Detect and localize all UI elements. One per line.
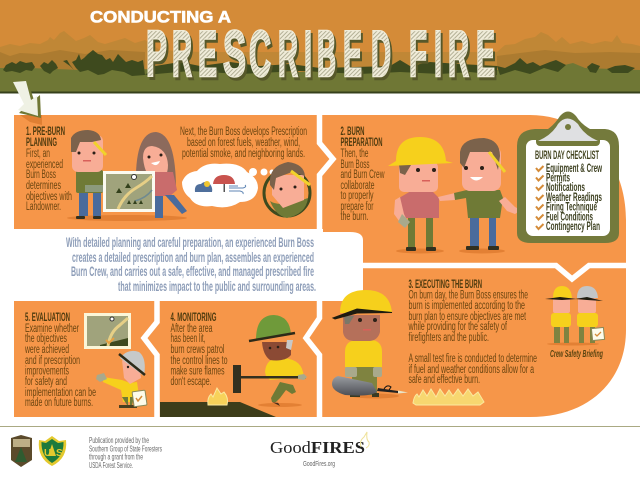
start arrow: [13, 81, 42, 125]
heading: 5. EVALUATION: [25, 312, 70, 324]
publication credit: Southern Group of State Foresters: [89, 444, 162, 454]
title: Prescribed Fire: R: [278, 17, 298, 90]
panel 2 text: prepare for: [340, 201, 374, 213]
checklist items: Notifications: [546, 182, 585, 194]
text: E: [476, 17, 495, 90]
body text: Burn Boss: [26, 169, 56, 181]
mid tree line: [0, 50, 640, 72]
body text: make sure flames: [170, 366, 225, 378]
body text: determines: [26, 180, 61, 192]
body text: implementation can be: [25, 387, 96, 399]
body text: burn crews patrol: [170, 344, 224, 356]
summary statement: that minimizes impact to the public and surrounding areas.: [118, 279, 316, 294]
title: Prescribed Fire: E: [343, 17, 362, 90]
burned ground: [160, 402, 276, 417]
panel 2 heading: [340, 126, 382, 149]
title: Prescribed Fire: R: [172, 17, 192, 90]
body text: and if prescription: [25, 355, 80, 367]
check marks: [536, 166, 544, 229]
orange process panels background: [14, 115, 626, 417]
panel 2 text: collaborate: [340, 180, 374, 192]
body text: Examine whether: [25, 323, 79, 335]
body text: the control lines to: [170, 355, 228, 367]
heading: PLANNING: [26, 137, 57, 149]
panel 2 text: [340, 148, 385, 223]
clip: [536, 118, 600, 146]
panel 2 text: Then, the: [340, 148, 368, 160]
publication credit: through a grant from the: [89, 452, 143, 462]
burn day checklist clipboard: [517, 112, 619, 243]
publication credit: Publication provided by the: [89, 436, 149, 445]
checklist items: Permits: [546, 172, 570, 184]
publication credit: USDA Forest Service.: [89, 461, 133, 470]
body text: First, an: [26, 148, 50, 160]
body text: improvements: [25, 366, 69, 378]
panel 3 text: A small test fire is conducted to determine: [408, 353, 537, 365]
body text: After the area: [170, 323, 213, 335]
panel 3 text: burn plan to ensure objectives are met: [408, 311, 526, 323]
panel 2 heading: 2. BURN: [340, 126, 364, 138]
heading: 1. PRE-BURN: [26, 126, 65, 138]
map: [103, 171, 155, 212]
panel 4: monitoring: [160, 312, 307, 417]
prescription text: potential smoke, and neighboring lands.: [182, 148, 305, 160]
checklist items: Fuel Conditions: [546, 212, 593, 224]
title: Prescribed Fire: F: [409, 17, 427, 90]
ground: [0, 63, 640, 92]
summary statement: Burn Crew, and carries out a safe, effective, and managed prescribed fire: [71, 264, 314, 279]
ground shadow: [67, 215, 187, 221]
thought bubble: [182, 164, 274, 207]
panel 3 text: safe and effective burn.: [408, 374, 480, 386]
title: Prescribed Fire: S: [225, 20, 248, 93]
prescription text: based on forest fuels, weather, wind,: [187, 137, 300, 149]
icon: sun: [204, 181, 210, 187]
title: Prescribed Fire: P: [146, 17, 167, 90]
small flame: [208, 388, 228, 405]
GoodFires logo: [270, 432, 369, 457]
title: Prescribed Fire: C: [251, 20, 273, 93]
GoodFires logo: GoodFIRES: [270, 438, 365, 457]
icon: umbrella: [213, 175, 235, 192]
panel 3 text: while providing for the safety of: [408, 321, 507, 333]
logo: USDA Forest Service: S: [56, 448, 63, 459]
body text: Landowner.: [26, 201, 61, 213]
logo: USDA Forest Service: [39, 436, 66, 466]
panel 3 text: On burn day, the Burn Boss ensures the: [408, 290, 528, 302]
icon: weather cloud: [195, 182, 212, 192]
title: Prescribed Fire: F: [411, 20, 429, 93]
title: Prescribed Fire: S: [223, 17, 246, 90]
body text: made on future burns.: [25, 397, 93, 409]
burn boss character with pencil: [454, 138, 521, 254]
title: Prescribed Fire: P: [148, 20, 169, 93]
body text: the objectives: [25, 333, 67, 345]
title: Prescribed Fire: D: [373, 20, 393, 93]
panel 3 text: [408, 290, 537, 386]
rake firefighter: [233, 315, 307, 407]
body text: [24, 323, 96, 409]
title: Prescribed Fire: R: [174, 20, 194, 93]
body text: were achieved: [24, 344, 69, 356]
prescription text: Next, the Burn Boss develops Prescription: [180, 126, 307, 138]
test fire flames: [413, 389, 484, 405]
title: Prescribed Fire: I: [304, 17, 312, 90]
summary statement: With detailed planning and careful preparation, an experienced Burn Boss: [66, 235, 314, 250]
title: Prescribed Fire: R: [450, 20, 471, 93]
body text: has been lit,: [170, 333, 206, 345]
title: Conducting a: CONDUCTING A: [90, 8, 231, 26]
website: GoodFires.org: [303, 459, 335, 468]
portrait circle: [264, 162, 310, 218]
title: Prescribed Fire: C: [249, 17, 271, 90]
title: Prescribed Fire: I: [306, 20, 314, 93]
header banner: [0, 0, 640, 94]
crew safety briefing figures: [545, 286, 605, 346]
burn boss character: [71, 130, 106, 219]
panel 3 text: burn is implemented according to the: [408, 300, 525, 312]
body text: for safety and: [25, 376, 67, 388]
forest behind title: [145, 60, 497, 75]
hard hat burn crew character: [388, 137, 455, 254]
title: Prescribed Fire: [146, 17, 497, 93]
title: Prescribed Fire: B: [319, 20, 338, 93]
panel 3 text: if fuel and weather conditions allow for a: [408, 364, 534, 376]
white zigzag dividers: [144, 114, 628, 418]
panel 5: evaluation: [24, 312, 147, 409]
panel 2 text: to properly: [340, 190, 374, 202]
logo: Southern Group of State Foresters: [11, 435, 32, 467]
logo: USDA Forest Service: U: [44, 448, 51, 459]
title: Prescribed Fire: R: [448, 17, 469, 90]
body text: don't escape.: [170, 376, 212, 388]
title: Prescribed Fire: I: [436, 20, 444, 93]
icon: wind: [229, 185, 246, 194]
text: E: [478, 20, 497, 93]
summary statement: creates a detailed prescription and burn plan, assembles an experienced: [72, 250, 314, 265]
title: Prescribed Fire: R: [280, 20, 300, 93]
checklist items: Firing Technique: [546, 202, 597, 214]
far tree line: [0, 31, 640, 75]
publication credit: [89, 436, 162, 470]
panel 3 text: firefighters and the public.: [408, 332, 489, 344]
title: Prescribed Fire: I: [434, 17, 442, 90]
summary statement: [66, 235, 316, 294]
drip torch: [332, 376, 408, 396]
prescription text: [180, 126, 307, 160]
title: Prescribed Fire: B: [317, 17, 336, 90]
dark tree line: [3, 50, 635, 76]
heading: 4. MONITORING: [170, 312, 217, 324]
panel 2 heading: PREPARATION: [340, 137, 382, 149]
body text: experienced: [26, 159, 63, 171]
evaluator firefighter: [96, 351, 147, 408]
logo flame: [360, 432, 369, 448]
footer divider: [0, 426, 640, 427]
drip torch firefighter: [332, 290, 408, 398]
title: Prescribed Fire: E: [345, 20, 364, 93]
heading: [26, 126, 65, 149]
body text: objectives with: [26, 191, 72, 203]
checklist items: [546, 163, 602, 233]
panel 2 text: and Burn Crew: [340, 169, 385, 181]
small map: [84, 313, 131, 349]
panel 3 heading: 3. EXECUTING THE BURN: [408, 279, 482, 291]
body text: [26, 148, 72, 213]
title: Prescribed Fire: D: [371, 17, 391, 90]
landowner character: [136, 132, 187, 218]
title: Prescribed Fire: E: [200, 20, 219, 93]
panel 2 text: Burn Boss: [340, 159, 370, 171]
panel 1: pre-burn planning: [26, 126, 310, 221]
body text: [170, 323, 228, 388]
title: Prescribed Fire: E: [198, 17, 217, 90]
panel 2 text: the burn.: [340, 211, 368, 223]
